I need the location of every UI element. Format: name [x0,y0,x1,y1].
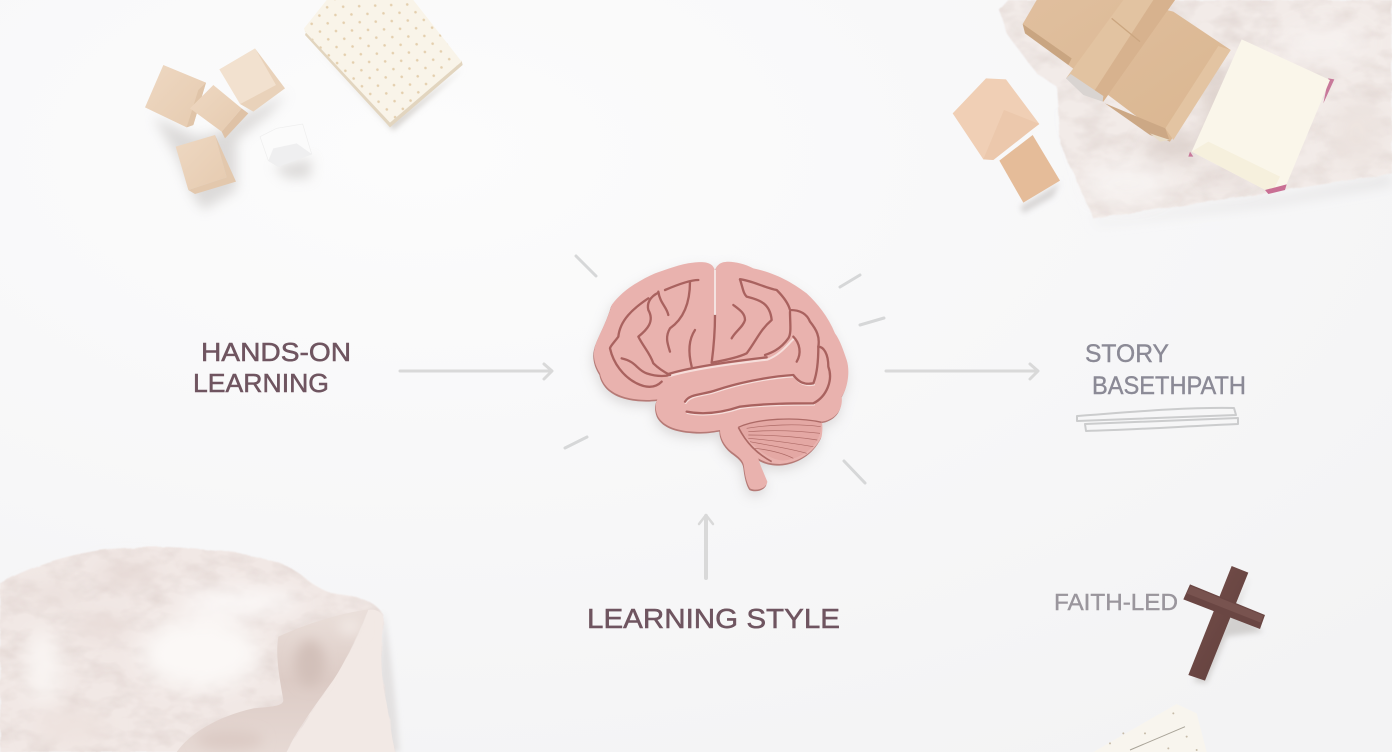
wooden block 3 [219,48,285,112]
groove highlights [669,339,814,415]
brain body [594,262,848,490]
right label: story based path [1085,340,1246,400]
cloth shadow [1057,100,1392,223]
bottom-left draped cloth [0,547,400,752]
arrow: up to brain [699,515,713,578]
wooden block 4 [176,135,236,194]
cross shadow [1193,577,1263,683]
left label: hands-on learning: LEARNING [193,368,329,398]
brain illustration [593,262,848,496]
centre fissure highlight [712,270,717,315]
white foam block [1188,39,1334,194]
center label: learning style: LEARNING STYLE [587,603,840,634]
left label: hands-on learning: HANDS-ON [201,337,351,367]
cloth body [0,547,395,752]
arrow: left to brain [400,364,552,379]
cerebellum [738,419,822,462]
right cloth strip [287,610,395,752]
white cube [260,124,312,167]
scribbled underline [1077,408,1238,431]
perforated board [304,0,463,127]
wrapped roll [1066,0,1175,102]
wooden cross [1183,566,1265,683]
board stitch [1130,727,1185,750]
arrow: brain to right [886,364,1038,379]
cross beams [1183,566,1265,681]
left label: hands-on learning [193,337,351,398]
wooden block stack [953,78,1060,213]
right label: story based path: BASETHPATH [1092,372,1246,400]
wrapped flat parcel [1023,0,1231,142]
top-right cloth and wrapped parcels [953,0,1392,223]
wooden block 1 [145,65,206,127]
block shadows [153,93,312,210]
board shadow [310,40,463,131]
bottom-right perforated board [1093,704,1207,752]
right-lower label: faith-led: FAITH-LED [1054,589,1178,615]
brain edge [593,263,848,491]
cloth shadow [373,610,400,752]
brain grooves [610,279,830,413]
brain radiating ticks [565,256,884,483]
linen cloth [999,0,1392,218]
cloth inner fold [177,609,368,752]
wooden block 2 [190,85,248,138]
top-left wooden blocks and board [145,0,463,210]
brain shadow [593,268,847,496]
right label: story based path: STORY [1085,340,1169,368]
